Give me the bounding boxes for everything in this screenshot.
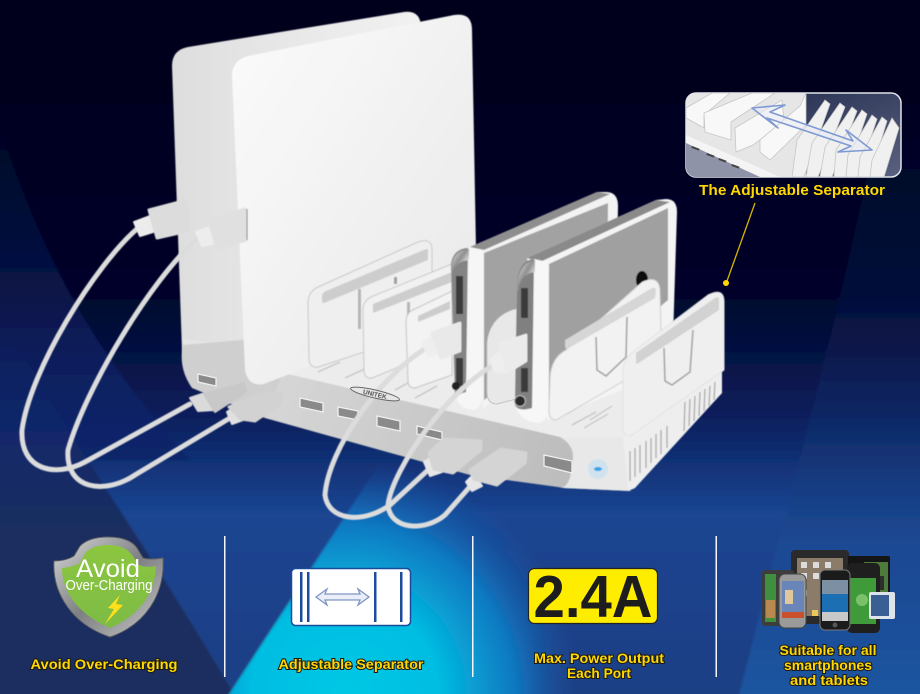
plug: tablet 1 bbox=[134, 200, 188, 238]
separator E bbox=[623, 292, 724, 436]
phone silver bbox=[779, 574, 806, 628]
label: suitable for all: smartphones bbox=[784, 657, 872, 673]
USB plugs bbox=[134, 200, 526, 491]
label: suitable for all: and tablets bbox=[790, 672, 868, 688]
floor bbox=[686, 93, 806, 177]
fins bbox=[792, 100, 899, 177]
phone side bbox=[515, 259, 548, 423]
dock slots bbox=[318, 362, 612, 428]
tablet: back bbox=[172, 12, 421, 390]
dividers bbox=[224, 536, 717, 677]
label: max power output bbox=[534, 650, 664, 681]
USB ports bbox=[198, 374, 572, 473]
dock corner with LED bbox=[560, 437, 630, 491]
iphone bbox=[820, 570, 850, 630]
label: suitable for all: Suitable for all bbox=[780, 642, 876, 658]
dock base bbox=[182, 330, 722, 491]
arrow: separator slide bbox=[752, 105, 872, 152]
vents bbox=[630, 382, 715, 481]
tablet large bbox=[791, 550, 849, 624]
phone small right bbox=[869, 592, 895, 619]
separator D bbox=[549, 280, 661, 420]
camera hole bbox=[636, 271, 648, 289]
separator B bbox=[363, 264, 452, 378]
phone left bbox=[762, 570, 794, 626]
dock front strip bbox=[686, 135, 780, 177]
icon: devices bbox=[762, 550, 895, 633]
phone: front bbox=[514, 199, 677, 423]
plug: dock left 2 bbox=[227, 393, 281, 424]
phone green bbox=[847, 563, 880, 633]
separator C bbox=[406, 291, 452, 388]
separator A bbox=[308, 241, 432, 367]
plug: phone front bbox=[490, 335, 526, 372]
icon: avoid over-charging shield bbox=[54, 537, 163, 637]
phone side bbox=[451, 248, 482, 410]
label: avoid over-charging: Avoid Over-Charging bbox=[30, 656, 178, 672]
plug: phone back bbox=[422, 323, 460, 358]
tablet right bbox=[848, 556, 890, 606]
LED bbox=[588, 459, 608, 479]
tablet: front bbox=[232, 15, 476, 384]
phone: back bbox=[451, 192, 618, 410]
double arrow bbox=[316, 589, 369, 605]
label: max power output: Each Port bbox=[567, 665, 631, 681]
caption: the adjustable separator: The Adjustable Separator bbox=[699, 183, 885, 199]
badge: 2.4A: 2.4A bbox=[534, 564, 652, 630]
icon: avoid over-charging shield: Over-Charging bbox=[66, 578, 152, 594]
label: suitable for all bbox=[780, 642, 876, 688]
logo badge: UNITEK bbox=[362, 389, 388, 401]
callout pointer bbox=[723, 203, 755, 286]
dock front face bbox=[265, 373, 573, 487]
dock top surface bbox=[283, 330, 722, 437]
label: adjustable separator: Adjustable Separator bbox=[278, 656, 424, 672]
separators: right group bbox=[549, 280, 724, 436]
plug: dock left 1 bbox=[190, 383, 246, 412]
plug: dock right 2 bbox=[466, 449, 526, 491]
dock vent side bbox=[623, 369, 722, 490]
cables bbox=[22, 228, 500, 526]
icon: adjustable separator bbox=[292, 568, 410, 626]
label: max power output: Max. Power Output bbox=[534, 650, 664, 666]
small separator between phones bbox=[487, 308, 520, 404]
icon: avoid over-charging shield: Avoid bbox=[76, 555, 140, 583]
separators: left group bbox=[308, 241, 452, 388]
logo badge bbox=[350, 384, 400, 404]
plug: tablet 2 bbox=[196, 209, 247, 249]
callout: inset photo bbox=[686, 93, 901, 177]
plug: dock right 1 bbox=[424, 439, 481, 476]
